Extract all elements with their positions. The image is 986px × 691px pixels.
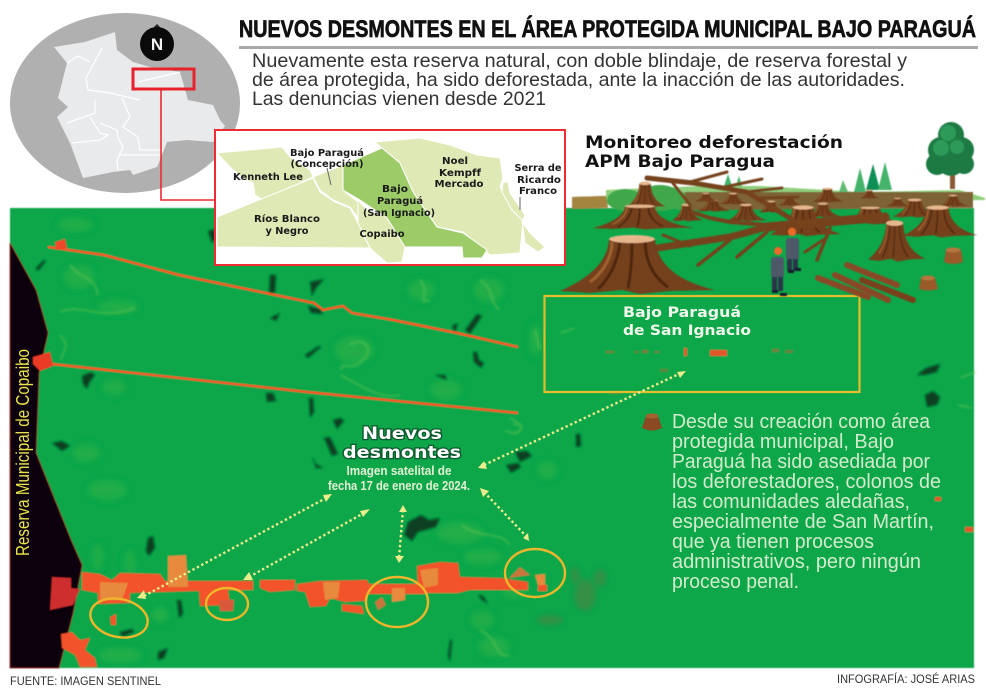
inset labels: Kenneth Lee xyxy=(233,172,303,183)
inset labels: Paraguá xyxy=(377,195,423,207)
author credit: INFOGRAFÍA: JOSÉ ARIAS xyxy=(837,673,975,686)
orange deforestation line north xyxy=(48,247,518,347)
label: Bajo Paraguá de San Ignacio xyxy=(623,305,751,339)
label: Nuevos desmontes: Imagen satelital de xyxy=(346,464,452,478)
red specks inside box xyxy=(606,348,973,532)
intro text: Las denuncias vienen desde 2021 xyxy=(252,88,546,110)
intro text: de área protegida, ha sido deforestada, ante la inacción de las autoridades. xyxy=(252,69,905,91)
intro text: Nuevamente esta reserva natural, con doble blindaje, de reserva forestal y xyxy=(252,50,907,72)
text block: Desde su creación xyxy=(672,411,941,593)
area: Kenneth Lee xyxy=(217,147,313,200)
inset labels: Noel xyxy=(442,156,468,167)
label: Bajo Paraguá de San Ignacio: Bajo Paraguá xyxy=(623,305,741,321)
brown ground xyxy=(572,192,973,210)
label: Reserva Municipal de Copaibo: Reserva Municipal de Copaibo xyxy=(13,349,33,556)
light vegetation wisps xyxy=(60,265,975,656)
deforestation scene illustration xyxy=(560,122,985,300)
inset labels: Mercado xyxy=(434,179,484,190)
globe background xyxy=(10,13,240,193)
intro text xyxy=(252,50,907,110)
north compass icon xyxy=(140,24,174,61)
area: Bajo Paraguá Concepción xyxy=(313,165,360,220)
Bolivia silhouette xyxy=(54,32,225,178)
dark forest spots xyxy=(36,229,940,662)
text block: Desde su creación: proceso penal. xyxy=(672,571,799,593)
icon: cut stump bullet xyxy=(642,414,662,430)
text block: Desde su creación: Desde su creación como área xyxy=(672,411,931,433)
inset labels: Bajo xyxy=(382,184,408,195)
area: Serra de Ricardo Franco xyxy=(502,182,545,252)
source credit: FUENTE: IMAGEN SENTINEL xyxy=(10,676,162,688)
north compass icon: N xyxy=(151,35,163,54)
far stumps xyxy=(695,188,968,221)
light vegetation patches xyxy=(57,218,557,663)
inset labels: Copaibo xyxy=(360,229,405,240)
locator map xyxy=(10,13,240,200)
inset labels: Kempff xyxy=(439,168,482,179)
inset labels: (San Ignacio) xyxy=(363,208,435,219)
label: Nuevos desmontes: Nuevos xyxy=(362,424,442,444)
inset labels: Serra de xyxy=(514,163,562,174)
text block: Desde su creación: que ya tienen procesos xyxy=(672,531,874,553)
brown specks xyxy=(536,567,606,625)
text block: Desde su creación: administrativos, pero ningún xyxy=(672,551,921,573)
label: Bajo Paraguá de San Ignacio: de San Ignacio xyxy=(623,323,751,339)
small cut stumps xyxy=(919,248,963,290)
text block: Desde su creación: protegida municipal, Bajo xyxy=(672,431,894,453)
inset labels: (Concepción) xyxy=(290,158,364,170)
large cut stump xyxy=(560,235,715,294)
area: Ríos Blanco y Negro xyxy=(217,178,370,248)
area: Bajo Paraguá San Ignacio xyxy=(343,148,487,258)
label: Nuevos desmontes: fecha 17 de enero de 2024. xyxy=(328,479,470,493)
orange deforestation line south xyxy=(52,364,518,413)
inset labels: Ríos Blanco xyxy=(254,213,320,225)
clearing blob south xyxy=(33,352,53,371)
inset map: protected areas xyxy=(215,130,565,265)
text block: Desde su creación: los deforestadores, colonos de xyxy=(672,471,941,493)
heading: Monitoreo deforestación: APM Bajo Paragua xyxy=(585,152,775,172)
satellite map panel xyxy=(10,208,975,668)
inset labels: Bajo Paraguá xyxy=(290,147,364,159)
text block: Desde su creación: Paraguá ha sido asediada por xyxy=(672,451,930,473)
inset labels: Franco xyxy=(519,186,557,197)
heading: Monitoreo deforestación xyxy=(585,133,843,172)
inset labels: y Negro xyxy=(266,226,309,237)
text block: Desde su creación: las comunidades aledañas, xyxy=(672,491,910,513)
area: Copaibo xyxy=(358,200,405,263)
distant hill and trees xyxy=(606,162,985,205)
label: Nuevos desmontes: desmontes xyxy=(343,443,461,463)
title rule xyxy=(239,46,978,49)
new clearings band xyxy=(50,555,547,667)
tree xyxy=(926,122,974,189)
locator red box xyxy=(133,69,194,89)
locator connector xyxy=(161,89,216,200)
department borders xyxy=(67,48,180,170)
black reserve area: Copaibo xyxy=(10,243,82,668)
worker in foreground xyxy=(771,247,787,296)
worker in background xyxy=(786,228,801,273)
heading: Monitoreo deforestación: Monitoreo deforestación xyxy=(585,133,843,153)
clearing blob north xyxy=(55,239,67,250)
area: Noel Kempff Mercado xyxy=(375,138,523,255)
fallen trees xyxy=(647,172,885,265)
inset labels: Ricardo xyxy=(517,175,561,186)
mid stumps xyxy=(593,182,977,262)
inset labels xyxy=(233,147,562,240)
dotted arrows xyxy=(137,371,686,599)
yellow box: Bajo Paraguá de San Ignacio xyxy=(544,296,860,392)
label: Nuevos desmontes xyxy=(328,424,470,493)
stacked logs xyxy=(818,265,913,300)
bushes xyxy=(607,185,690,211)
yellow circles marking clearings xyxy=(87,549,565,643)
text block: Desde su creación: especialmente de San Martín, xyxy=(672,511,934,533)
